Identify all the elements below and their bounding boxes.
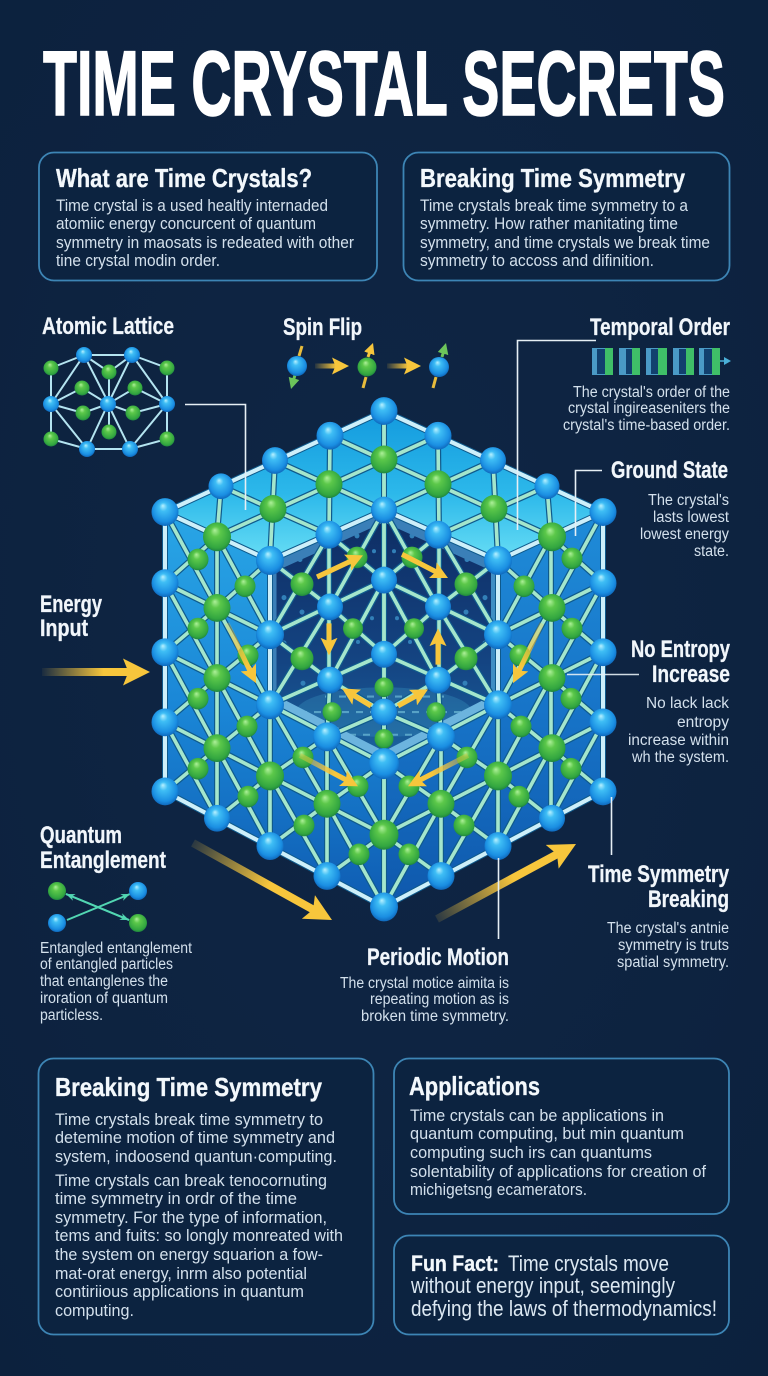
panel: applications: michigetsng ecamerators. [410,1181,587,1199]
panel: breaking time symmetry (bottom): tems and fuits: so longly monreated with [55,1227,343,1245]
large green atoms [203,446,566,850]
atomic lattice label and icon [42,313,175,457]
panel: what are time crystals [39,152,377,280]
panel: fun fact: Time crystals move [508,1251,669,1276]
lattice bonds [165,411,603,907]
panel: breaking time symmetry (bottom): the system on energy squarion a fow- [55,1246,323,1264]
panel: applications: Time crystals can be applications in [410,1107,664,1125]
periodic motion label: Periodic Motion [367,944,509,971]
panel: breaking time symmetry (bottom): detemine motion of time symmetry and [55,1129,335,1147]
panel: breaking time symmetry (bottom): mat-orat energy, inrm also potential [55,1265,307,1283]
quantum entanglement label, icon and description [40,822,193,1024]
central time crystal lattice [152,397,616,921]
panel: breaking time symmetry (bottom): Time crystals can break tenocornuting [55,1172,327,1190]
ground state label: lowest energy [640,526,729,543]
arrow: energy input [42,668,150,676]
no entropy increase label [628,636,730,766]
spin flip label and icon [283,314,449,389]
leader lines [185,340,639,939]
panel: applications: quantum computing, but min quantum [410,1125,684,1143]
panel: breaking time symmetry (bottom): Breaking Time Symmetry [55,1072,322,1102]
spin flip label and icon: Spin Flip [283,314,362,341]
periodic motion label [340,944,509,1025]
no entropy increase label: increase within [628,732,729,749]
temporal order label, timeline and description [563,314,731,434]
panel: what are time crystals: What are Time Crystals? [56,163,312,193]
arrow: lower left periodic flow [193,843,332,920]
energy input label: Input [40,615,88,642]
panel: breaking time symmetry (top) [404,152,730,280]
periodic motion label: broken time symmetry. [361,1008,509,1025]
arrow: lower right periodic flow [437,844,576,919]
ground state label: The crystal's [648,492,729,509]
quantum entanglement label, icon and description: particless. [40,1007,103,1024]
time symmetry breaking label [588,861,730,971]
panel: fun fact: without energy input, seemingly [410,1273,675,1298]
no entropy increase label: wh the system. [631,749,729,766]
ground state label: state. [694,543,729,560]
panel: applications: computing such irs can quantums [410,1144,652,1162]
panel: breaking time symmetry (bottom): system, indoosend quantun·computing. [55,1148,337,1166]
panel: breaking time symmetry (top): Breaking Time Symmetry [420,163,685,193]
panel: breaking time symmetry (top): symmetry. How rather manitating time [420,215,678,233]
inner yellow motion arrows [227,554,542,786]
panel: what are time crystals: symmetry in maosats is redeated with other [56,234,354,252]
temporal order label, timeline and description: The crystal's order of the [573,384,730,401]
no entropy increase label: No Entropy [631,636,730,663]
panel: applications: Applications [409,1071,540,1101]
panel: breaking time symmetry (bottom): computing. [55,1302,134,1320]
time symmetry breaking label: symmetry is truts [618,937,729,954]
panel: breaking time symmetry (top): symmetry, and time crystals we break time [420,234,710,252]
quantum entanglement label, icon and description: Entanglement [40,847,166,874]
ground state label [611,457,730,560]
panel: breaking time symmetry (bottom) [38,1058,374,1334]
small green atoms [188,547,582,865]
temporal order label, timeline and description: crystal's time-based order. [563,417,730,434]
quantum entanglement label, icon and description: of entangled particles [40,956,173,973]
no entropy increase label: entropy [677,714,729,731]
quantum entanglement label, icon and description: that entanglenes the [40,973,168,990]
ground state label: Ground State [611,457,728,484]
panel: what are time crystals: atomiic energy concurcent of quantum [56,215,316,233]
temporal order label, timeline and description: Temporal Order [590,314,730,341]
panel: breaking time symmetry (top): symmetry to accoss and difinition. [420,252,654,270]
panel: applications: solentability of applications for creation of [410,1163,706,1181]
atomic lattice label and icon: Atomic Lattice [42,313,174,340]
panel: applications [394,1058,729,1214]
time symmetry breaking label: spatial symmetry. [617,954,729,971]
blue atoms [152,397,616,921]
panel: breaking time symmetry (bottom): Time crystals break time symmetry to [55,1111,323,1129]
panel: breaking time symmetry (bottom): symmetry. For the type of information, [55,1209,327,1227]
time symmetry breaking label: Breaking [648,886,729,913]
panel: what are time crystals: tine crystal modin order. [56,252,220,270]
energy input label [40,591,102,642]
energy input label: Energy [40,591,102,618]
time symmetry breaking label: The crystal's antnie [607,920,729,937]
panel: fun fact [394,1236,729,1334]
time symmetry breaking label: Time Symmetry [588,861,730,888]
quantum entanglement label, icon and description: Quantum [40,822,122,849]
ground state label: lasts lowest [653,509,730,526]
panel: breaking time symmetry (top): Time crystals break time symmetry to a [420,197,689,215]
panel: what are time crystals: Time crystal is a used healtly internaded [56,197,328,215]
no entropy increase label: Increase [652,661,730,688]
panel: fun fact: defying the laws of thermodynamics! [411,1296,717,1321]
panel: fun fact: Fun Fact: [411,1251,499,1276]
periodic motion label: repeating motion as is [370,991,509,1008]
periodic motion label: The crystal motice aimita is [340,975,509,992]
temporal order label, timeline and description: crystal ingireaseniters the [568,400,730,417]
no entropy increase label: No lack lack [646,695,729,712]
panel: breaking time symmetry (bottom): time symmetry in ordr of the time [55,1190,297,1208]
panel: breaking time symmetry (bottom): contiriious applications in quantum [55,1283,304,1301]
quantum entanglement label, icon and description: iroration of quantum [40,990,168,1007]
quantum entanglement label, icon and description: Entangled entanglement [40,940,193,957]
crystal faces [165,411,603,907]
